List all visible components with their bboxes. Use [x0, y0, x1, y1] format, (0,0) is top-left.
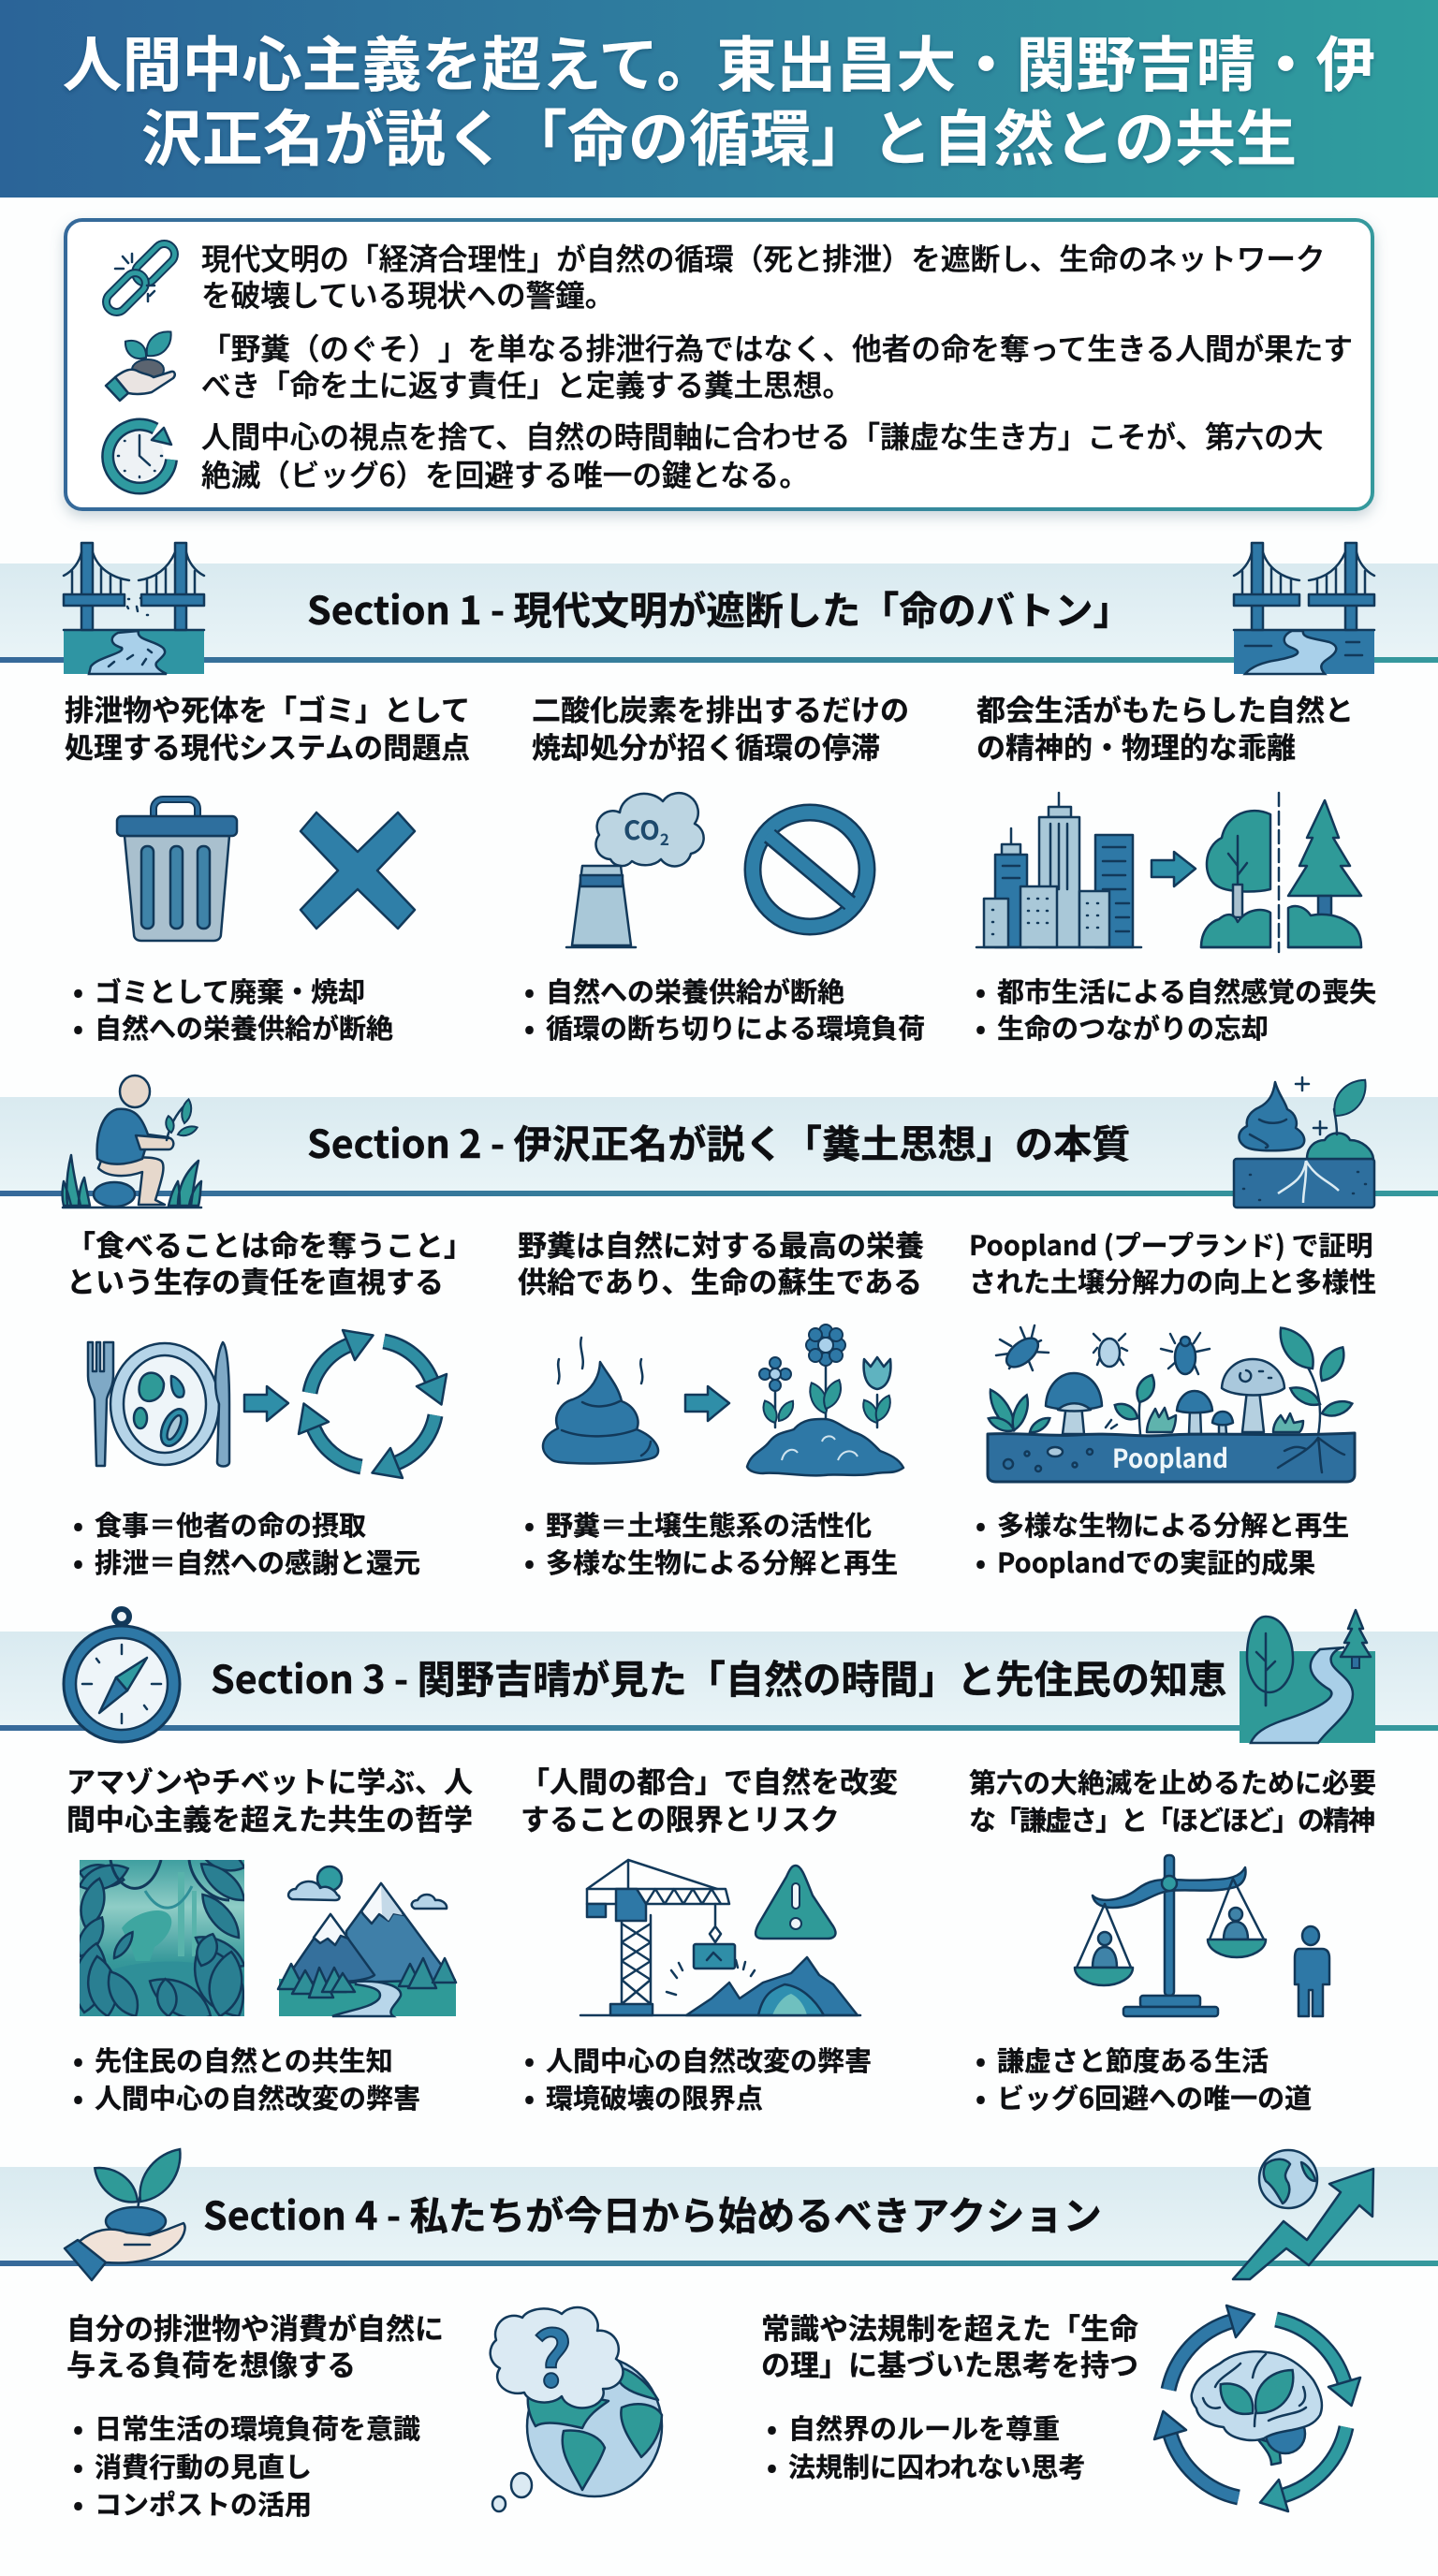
column: section 4 item 2: の理」に基づいた思考を持つ: [761, 2342, 1138, 2384]
text: summary point 1: 現代文明の「経済合理性」が自然の循環（死と排泄）を遮断し、生命のネットワーク: [201, 236, 1326, 279]
column: section 3 item 2: 「人間の都合」で自然を改変: [521, 1759, 898, 1801]
icon: broken bridge right: [1234, 543, 1374, 674]
column: section 3 item 1: アマゾンやチベットに学ぶ、人: [66, 1759, 473, 1801]
column: section 1 item 2: [524, 687, 909, 1010]
icon: jungle: [80, 1860, 244, 2016]
column: section 1 item 3: [976, 687, 1376, 1010]
column: section 2 item 2: 供給であり、生命の蘇生である: [518, 1259, 922, 1301]
bullet: section 3 item 1 second: •: [73, 2077, 83, 2116]
column: section 1 item 1: [65, 687, 470, 1010]
icon: soil, droppings and sprout: [1234, 1073, 1374, 1208]
bullet: section 3 item 3 second: ビッグ6回避への唯一の道: [997, 2077, 1312, 2116]
section 4 heading: Section 4 - 私たちが今日から始めるべきアクション: [203, 2185, 1102, 2241]
bullet: section 3 item 1 second: 人間中心の自然改変の弊害: [95, 2077, 420, 2116]
column: section 3 item 1: 間中心主義を超えた共生の哲学: [66, 1796, 473, 1838]
bullet: section 4 item 1 second: •: [73, 2446, 83, 2485]
column: section 2 item 3: された土壌分解力の向上と多様性: [969, 1261, 1376, 1300]
bullets: •: [73, 1504, 83, 1544]
column: section 2 item 3: [969, 1224, 1376, 1544]
column: section 1 item 2: 二酸化炭素を排出するだけの: [532, 687, 909, 729]
bullets: 謙虚さと節度ある生活: [997, 2040, 1269, 2079]
icon: globe with question thought: [491, 2298, 662, 2511]
icon: broken bridge left: [64, 543, 204, 674]
bullet: section 2 item 1 second: 排泄＝自然への感謝と還元: [95, 1542, 420, 1581]
text: summary point 2: 「野糞（のぐそ）」を単なる排泄行為ではなく、他者の命を奪って生きる人間が果たす: [201, 326, 1353, 369]
bullet: section 1 item 1 second: 自然への栄養供給が断絶: [95, 1007, 393, 1046]
bullets: •: [767, 2408, 777, 2447]
bullet: section 4 item 2 second: 法規制に囚われない思考: [788, 2446, 1086, 2485]
bullet: section 4 item 1 third: •: [73, 2483, 83, 2523]
text: summary point 1: [201, 236, 1326, 315]
icon: squatting person: [62, 1076, 201, 1208]
bullet: section 1 item 3 second: •: [976, 1007, 986, 1046]
column: section 2 item 1: [66, 1222, 473, 1544]
column: section 2 item 1: 「食べることは命を奪うこと」: [66, 1222, 473, 1265]
section 1 heading: Section 1 - 現代文明が遮断した「命のバトン」: [307, 579, 1132, 636]
icon: brain with sprout and cycle arrows: [1154, 2305, 1360, 2511]
bullets: •: [524, 971, 535, 1010]
bullets: •: [73, 2040, 83, 2079]
text: summary point 2: べき「命を土に返す責任」と定義する糞土思想。: [201, 362, 852, 405]
icon: mountains: [278, 1866, 456, 2016]
column: section 2 item 1: という生存の責任を直視する: [66, 1259, 444, 1301]
section 4 header: [0, 2142, 1438, 2280]
column: section 2 item 3: Poopland (プープランド) で証明: [969, 1224, 1372, 1264]
bullets: •: [976, 2040, 986, 2079]
bullet: section 4 item 2 second: •: [767, 2446, 777, 2485]
column: section 1 item 1: 処理する現代システムの問題点: [65, 724, 470, 767]
column: section 4 item 1: [66, 2305, 444, 2447]
column: section 3 item 3: [969, 1762, 1376, 2079]
icon: river and trees: [1240, 1610, 1375, 1743]
bullets: 野糞＝土壌生態系の活性化: [546, 1504, 872, 1544]
column: section 1 item 3: 都会生活がもたらした自然と: [976, 687, 1354, 729]
bullet: section 1 item 2 second: •: [524, 1007, 535, 1046]
text: summary point 3: 絶滅（ビッグ6）を回避する唯一の鍵となる。: [201, 452, 809, 495]
bullet: section 2 item 3 second: •: [976, 1542, 986, 1581]
bullet: section 1 item 2 second: 循環の断ち切りによる環境負荷: [546, 1007, 925, 1046]
bullet: section 2 item 2 second: 多様な生物による分解と再生: [546, 1542, 898, 1581]
panel: summary: [66, 220, 1372, 509]
bullets: •: [524, 1504, 535, 1544]
bullets: 自然界のルールを尊重: [788, 2408, 1060, 2447]
bullets: •: [524, 2040, 535, 2079]
text: summary point 3: 人間中心の視点を捨て、自然の時間軸に合わせる「謙虚な生き方」こそが、第六の大: [201, 414, 1323, 457]
bullets: 日常生活の環境負荷を意識: [95, 2408, 420, 2447]
column: section 1 item 3: の精神的・物理的な乖離: [976, 724, 1296, 767]
title banner: [0, 0, 1438, 198]
bullets: 多様な生物による分解と再生: [997, 1504, 1349, 1544]
bullet: section 1 item 1 second: •: [73, 1007, 83, 1046]
icon: cross mark: [301, 812, 415, 929]
bullet: section 2 item 1 second: •: [73, 1542, 83, 1581]
icon: compass: [64, 1609, 180, 1742]
icon: chimney with CO2 cloud: [566, 793, 704, 947]
bullets: •: [976, 971, 986, 1010]
column: section 3 item 2: することの限界とリスク: [521, 1796, 840, 1838]
bullets: •: [73, 971, 83, 1010]
section 2 heading: Section 2 - 伊沢正名が説く「糞土思想」の本質: [307, 1113, 1130, 1169]
section 1 header: [0, 543, 1438, 674]
icon: hand holding sprout: [106, 326, 177, 401]
icon: meal plate: [88, 1342, 229, 1466]
column: section 3 item 1: [66, 1759, 473, 2079]
column: section 3 item 3: な「謙虚さ」と「ほどほど」の精神: [969, 1799, 1375, 1838]
bullet: section 4 item 1 third: コンポストの活用: [95, 2483, 312, 2523]
icon: prohibition sign: [753, 812, 867, 927]
section 2 header: [0, 1073, 1438, 1208]
bullet: section 3 item 2 second: 環境破壊の限界点: [546, 2077, 763, 2116]
section 3 header: [0, 1609, 1438, 1743]
column: section 4 item 1: 自分の排泄物や消費が自然に: [66, 2305, 444, 2348]
icon: droppings: [543, 1338, 658, 1463]
bullets: •: [976, 1504, 986, 1544]
bullet: section 2 item 2 second: •: [524, 1542, 535, 1581]
icon: circular arrows: [299, 1330, 447, 1478]
icon: Poopland ecosystem: Poopland: [1112, 1439, 1228, 1476]
bullet: section 4 item 1 second: 消費行動の見直し: [95, 2446, 312, 2485]
icon: crane: [580, 1860, 860, 2015]
icon: hand with sprout: [65, 2142, 190, 2280]
column: section 4 item 2: [761, 2305, 1138, 2447]
column: section 1 item 2: 焼却処分が招く循環の停滞: [532, 724, 880, 767]
icon: Poopland ecosystem: [985, 1321, 1355, 1482]
arrow: [244, 1386, 288, 1421]
bullet: section 3 item 2 second: •: [524, 2077, 535, 2116]
column: section 3 item 3: 第六の大絶滅を止めるために必要: [969, 1762, 1376, 1801]
bullets: ゴミとして廃棄・焼却: [95, 971, 365, 1010]
column: section 4 item 1: 与える負荷を想像する: [66, 2342, 356, 2384]
bullets: 先住民の自然との共生知: [95, 2040, 393, 2079]
column: section 2 item 2: 野糞は自然に対する最高の栄養: [518, 1222, 924, 1265]
icon: chimney with CO2 cloud: 2: [660, 827, 669, 850]
title banner: 人間中心主義を超えて。東出昌大・関野吉晴・伊: [63, 18, 1375, 104]
icon: flowers on soil: [747, 1325, 903, 1475]
text: summary point 2: [201, 326, 1353, 405]
bullet: section 2 item 3 second: Pooplandでの実証的成果: [997, 1542, 1315, 1581]
icon: chimney with CO2 cloud: CO: [624, 811, 660, 848]
bullets: •: [73, 2408, 83, 2447]
column: section 3 item 2: [521, 1759, 898, 2079]
column: section 1 item 1: 排泄物や死体を「ゴミ」として: [65, 687, 470, 729]
section 3 heading: Section 3 - 関野吉晴が見た「自然の時間」と先住民の知恵: [211, 1648, 1226, 1705]
column: section 4 item 2: 常識や法規制を超えた「生命: [761, 2305, 1138, 2348]
icon: globe and rising arrow: [1233, 2150, 1373, 2279]
icon: balance scales and person: [1075, 1855, 1329, 2016]
bullet: section 1 item 3 second: 生命のつながりの忘却: [997, 1007, 1269, 1046]
bullets: 自然への栄養供給が断絶: [546, 971, 844, 1010]
icon: globe with question thought: ?: [533, 2298, 572, 2409]
bullets: 人間中心の自然改変の弊害: [546, 2040, 872, 2079]
bullets: 食事＝他者の命の摂取: [95, 1504, 366, 1544]
arrow: [685, 1386, 729, 1421]
icon: city to nature: [976, 793, 1361, 952]
title banner: 沢正名が説く「命の循環」と自然との共生: [141, 90, 1297, 178]
text: summary point 3: [201, 414, 1323, 495]
bullet: section 3 item 3 second: •: [976, 2077, 986, 2116]
icon: clock with return arrow: [108, 425, 171, 489]
text: summary point 1: を破壊している現状への警鐘。: [201, 272, 614, 315]
icon: trash can: [117, 799, 237, 941]
bullets: 都市生活による自然感覚の喪失: [997, 971, 1376, 1010]
column: section 2 item 2: [518, 1222, 924, 1544]
icon: broken chain: [102, 240, 179, 316]
